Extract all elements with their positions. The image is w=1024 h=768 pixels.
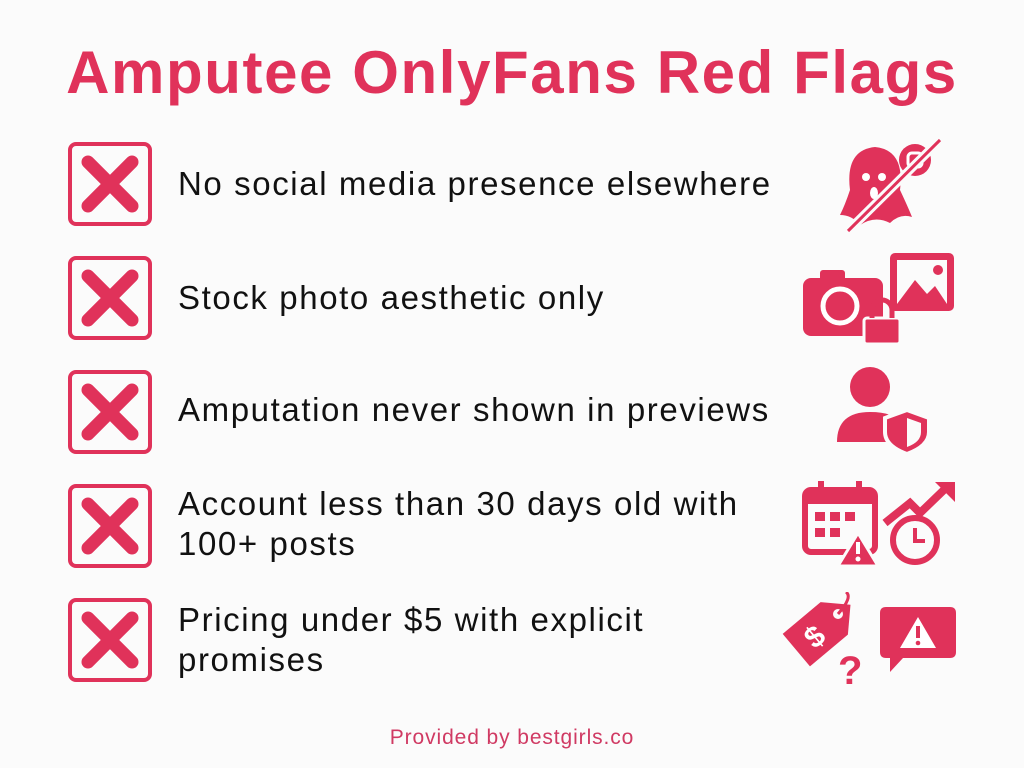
icon: calendar warning and growth clock (802, 481, 955, 565)
row 4 text: Account less than 30 days old with (178, 485, 739, 522)
title: Amputee OnlyFans Red Flags (66, 39, 958, 106)
icon: ghost crossed (840, 138, 941, 232)
row 5 text: promises (178, 641, 325, 678)
row 4 checkbox (68, 484, 152, 568)
row 1 checkbox (68, 142, 152, 226)
row 4 text (178, 485, 739, 562)
footer: Provided by bestgirls.co (390, 726, 634, 749)
row 5 text: Pricing under $5 with explicit (178, 601, 644, 638)
row 3 text: Amputation never shown in previews (178, 391, 770, 428)
row 5 text (178, 601, 644, 678)
row 1 text: No social media presence elsewhere (178, 165, 772, 202)
row 4 text: 100+ posts (178, 525, 356, 562)
row 3 checkbox (68, 370, 152, 454)
row 5 checkbox (68, 598, 152, 682)
row 2 text: Stock photo aesthetic only (178, 279, 605, 316)
icon: price tag question and warning bubble (782, 592, 956, 687)
icon: user with shield (837, 367, 928, 452)
icon: price tag question and warning bubble: $ (798, 619, 832, 655)
icon: camera and picture lock (803, 253, 954, 342)
row 2 checkbox (68, 256, 152, 340)
